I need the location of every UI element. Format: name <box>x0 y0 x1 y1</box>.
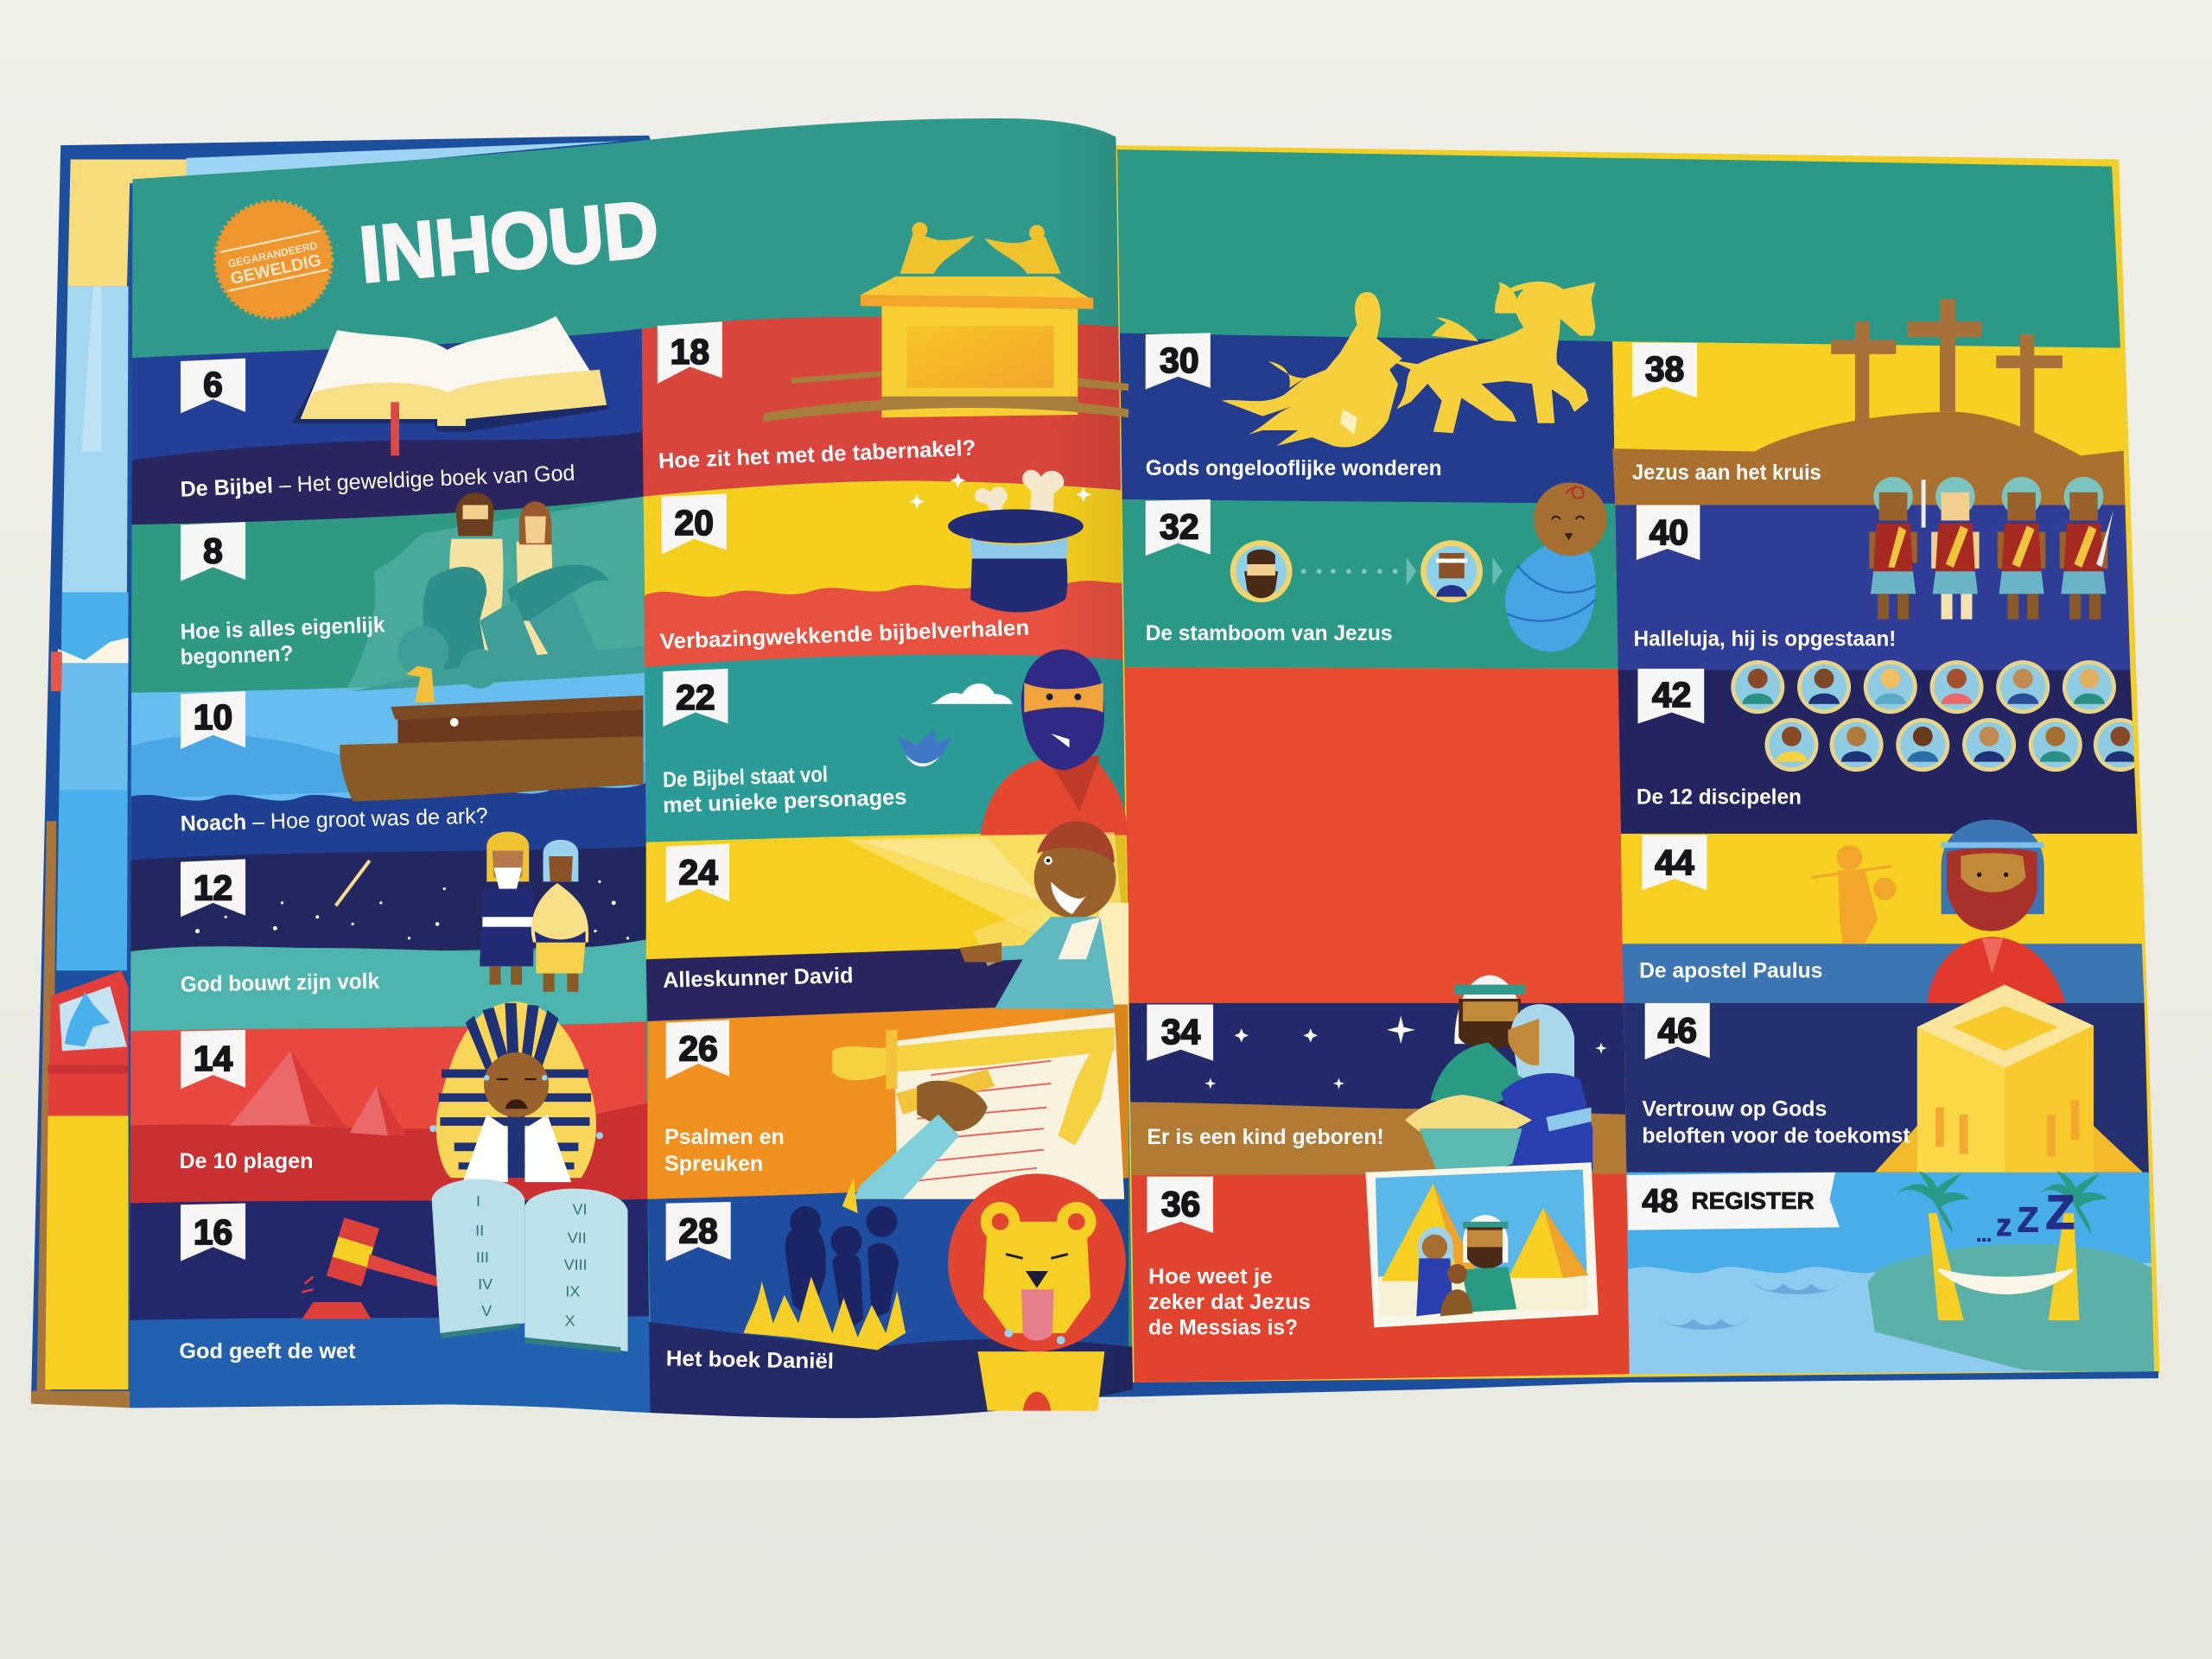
icon: island with hammock and palms <box>1663 1171 2165 1376</box>
icon: starry sky <box>195 861 629 939</box>
icon: stone tablets: III <box>476 1249 489 1266</box>
flag 14 <box>181 1030 245 1089</box>
icon: lion <box>948 1173 1126 1411</box>
label 36: zeker dat Jezus <box>1148 1290 1311 1314</box>
icon: baby Jesus <box>1505 482 1607 652</box>
flag 32 <box>1146 499 1211 556</box>
label 8: begonnen? <box>180 641 294 670</box>
right page cover edge <box>1131 1371 2158 1391</box>
icon: David <box>847 821 1128 1008</box>
flag 24 <box>666 843 729 903</box>
icon: stone tablets: VI <box>573 1201 587 1218</box>
icon: Abraham and Sarah <box>480 831 588 992</box>
flag 46 <box>1645 1003 1710 1059</box>
icon: golden temple city <box>1875 985 2143 1173</box>
flag 14: 14 <box>194 1039 233 1078</box>
flag 16 <box>181 1204 245 1262</box>
label 36: de Messias is? <box>1148 1315 1298 1339</box>
label 30: Gods ongelooflijke wonderen <box>1146 456 1442 480</box>
flag 42: 42 <box>1652 675 1691 715</box>
label 8: Hoe is alles eigenlijk <box>180 613 386 645</box>
flag 40: 40 <box>1649 512 1688 552</box>
book cover and left endpaper strip <box>31 136 1425 1408</box>
icon: pyramids <box>230 1051 406 1135</box>
icon: stone tablets: VIII <box>564 1255 588 1273</box>
label 20: Verbazingwekkende bijbelverhalen <box>659 616 1030 654</box>
flag 44: 44 <box>1655 842 1694 882</box>
flag 30 <box>1146 333 1211 390</box>
page gutter shading <box>1044 118 1133 1403</box>
icon: three crosses on hill <box>1831 299 2063 435</box>
right page yellow border <box>1115 145 2160 1387</box>
icon: stone tablets <box>432 1179 628 1353</box>
label 16: God geeft de wet <box>179 1339 356 1363</box>
banner 48 register <box>1626 1173 1840 1230</box>
panel: left page rows <box>120 113 1150 1425</box>
icon: stone tablets: X <box>565 1313 575 1330</box>
icon: scroll, hand and pencil <box>832 1013 1124 1199</box>
icon: island with hammock and palms: z <box>1996 1207 2012 1243</box>
label 26: Psalmen en <box>664 1125 785 1149</box>
flag 36: 36 <box>1161 1184 1200 1224</box>
flag 22: 22 <box>676 677 715 717</box>
label 22: met unieke personages <box>663 785 907 817</box>
flags and page numbers <box>181 321 1840 1262</box>
flag 44 <box>1642 836 1707 890</box>
icon: stone tablets: VII <box>568 1229 587 1246</box>
label 40: Halleluja, hij is opgestaan! <box>1634 627 1896 652</box>
icon: island with hammock and palms: Z <box>2045 1185 2075 1239</box>
icon: three men in fire <box>743 1178 917 1350</box>
flag 12 <box>181 859 245 917</box>
illustrations: left page <box>195 201 1128 1411</box>
flag 38: 38 <box>1645 349 1684 389</box>
flag 28 <box>666 1202 731 1262</box>
label 14: De 10 plagen <box>179 1149 313 1173</box>
label 36 <box>1148 1265 1311 1339</box>
flag 20: 20 <box>675 503 714 543</box>
icon: twelve disciples medallions <box>1731 660 2147 772</box>
label 12: God bouwt zijn volk <box>181 969 380 997</box>
flag 46: 46 <box>1658 1011 1697 1051</box>
icon: island with hammock and palms: ... <box>1976 1226 1992 1246</box>
illustrations: right page <box>1205 282 2165 1376</box>
icon: stone tablets: II <box>475 1222 484 1239</box>
label 38: Jezus aan het kruis <box>1632 461 1821 485</box>
icon: Adam and Eve in the garden <box>346 493 645 691</box>
icon: gavel <box>302 1217 437 1319</box>
icon: open bible <box>292 316 609 455</box>
flag 22 <box>663 669 728 727</box>
label 42: De 12 discipelen <box>1637 785 1802 810</box>
label 46 <box>1642 1096 1910 1147</box>
flag 34: 34 <box>1161 1012 1201 1052</box>
icon: stone tablets: I <box>476 1192 480 1210</box>
title: INHOUD <box>356 184 662 299</box>
label 46: beloften voor de toekomst <box>1642 1123 1910 1147</box>
label 34: Er is een kind geboren! <box>1147 1125 1384 1149</box>
flag 10 <box>181 691 245 749</box>
flag 26: 26 <box>678 1029 718 1069</box>
icon: stone tablets: IV <box>478 1275 493 1293</box>
flag 16: 16 <box>194 1212 232 1252</box>
label 46: Vertrouw op Gods <box>1642 1096 1827 1121</box>
label 26 <box>664 1125 785 1176</box>
icon: badge: GEGARANDEERD <box>227 239 319 270</box>
icon: badge: GEWELDIG <box>229 251 323 289</box>
flag 10: 10 <box>194 697 232 737</box>
label 8 <box>180 613 386 670</box>
icon: Noah's ark <box>340 666 643 801</box>
flag 8 <box>181 522 245 582</box>
icon: stone tablets: IX <box>565 1282 580 1300</box>
flag 30: 30 <box>1160 340 1199 380</box>
banner 48 register: REGISTER <box>1692 1187 1815 1214</box>
banner 48 register: 48 <box>1642 1182 1678 1218</box>
icon: apostle Paul <box>1811 820 2065 1003</box>
label 24: Alleskunner David <box>663 963 854 993</box>
icon: photo of family at pyramids <box>1365 1162 1599 1327</box>
flag 20 <box>662 493 727 555</box>
flag 40 <box>1637 505 1700 560</box>
flag 8: 8 <box>203 531 223 570</box>
flag 18 <box>658 321 722 384</box>
icon: top hat with bones <box>909 470 1091 613</box>
label 36: Hoe weet je <box>1148 1265 1273 1289</box>
flag 38 <box>1632 343 1697 397</box>
label 22 <box>663 762 907 817</box>
flag 6 <box>181 359 245 413</box>
icon: nativity stars and family <box>1205 976 1607 1171</box>
icon: prophet, bird and cloud <box>897 650 1128 836</box>
flag 12: 12 <box>194 868 232 908</box>
icon: Roman soldiers <box>1869 477 2113 620</box>
icon: island with hammock and palms: Z <box>2018 1199 2039 1239</box>
icon: family tree medallions <box>1230 540 1503 602</box>
label 32: De stamboom van Jezus <box>1146 621 1392 645</box>
flag 28: 28 <box>678 1211 718 1250</box>
icon: stone tablets: V <box>481 1302 492 1319</box>
icon: badge <box>216 201 332 317</box>
label 10: Noach – Hoe groot was de ark? <box>180 804 488 836</box>
icon: ark of the covenant <box>763 222 1128 422</box>
flag 34 <box>1147 1004 1213 1061</box>
icon: chariot of fire and horses <box>1222 282 1596 448</box>
flag 26 <box>666 1020 729 1079</box>
flag 32: 32 <box>1160 507 1199 547</box>
section labels <box>179 436 1910 1374</box>
flag 24: 24 <box>678 853 718 893</box>
flag 6: 6 <box>203 365 223 404</box>
flag 42 <box>1638 669 1704 724</box>
label 26: Spreuken <box>664 1152 763 1176</box>
label 22: De Bijbel staat vol <box>663 762 828 792</box>
panel: right page rows <box>1108 141 2165 1385</box>
icon: pharaoh <box>429 1001 603 1182</box>
flag 36 <box>1147 1177 1213 1233</box>
flag 18: 18 <box>671 332 709 372</box>
label 6: De Bijbel – Het geweldige boek van God <box>180 461 575 502</box>
label 44: De apostel Paulus <box>1639 958 1822 982</box>
label 28: Het boek Daniël <box>666 1346 834 1374</box>
label 18: Hoe zit het met de tabernakel? <box>658 436 976 474</box>
